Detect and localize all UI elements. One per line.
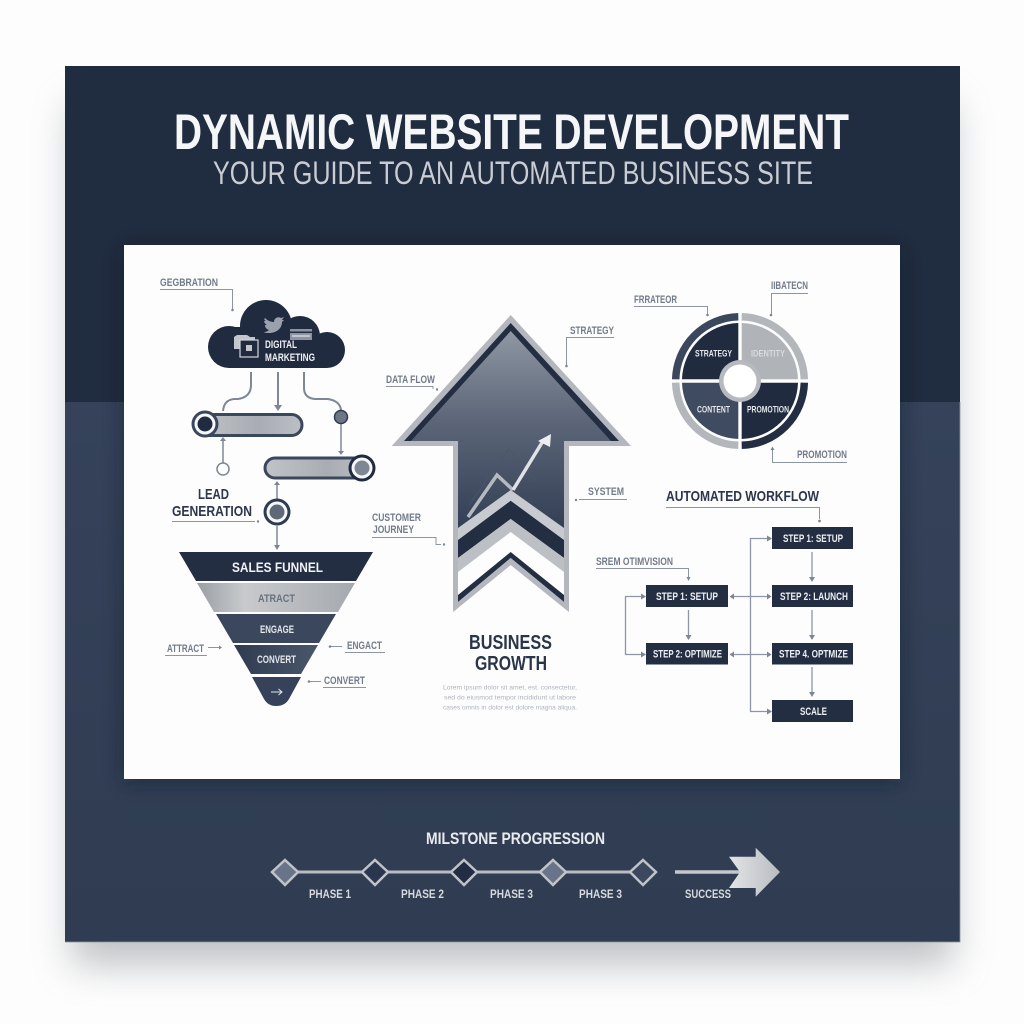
- phase labels: PHASE 3: [579, 887, 622, 901]
- phase labels: [309, 887, 731, 901]
- callout: data flow: DATA FLOW: [386, 374, 435, 386]
- target node: [264, 481, 290, 550]
- timeline line: [285, 870, 643, 874]
- description text: Lorem ipsum dolor sit amet, est. consectetur,: [443, 684, 577, 692]
- band: sales funnel: [179, 552, 373, 581]
- arrow white interior: [458, 490, 564, 602]
- callout: strategy: [565, 325, 614, 367]
- phase labels: SUCCESS: [685, 887, 731, 901]
- subtitle: YOUR GUIDE TO AN AUTOMATED BUSINESS SITE: [213, 155, 813, 191]
- callout: customer journey: CUSTOMER: [372, 512, 421, 524]
- band: convert: CONVERT: [257, 654, 296, 666]
- dark background panel: [65, 66, 960, 942]
- quadrant labels: IDENTITY: [751, 348, 786, 360]
- step: optimize right: STEP 4. OPTMIZE: [779, 648, 848, 660]
- description text: sed do eiusmod tempor incididunt ut labore: [444, 694, 576, 702]
- title: DYNAMIC WEBSITE DEVELOPMENT: [174, 104, 849, 160]
- workflow connectors: [626, 536, 815, 714]
- callout: customer journey: [372, 512, 445, 546]
- callout: data flow: [386, 374, 438, 391]
- arrow outline: [392, 315, 631, 612]
- step: scale: [772, 700, 853, 722]
- phase labels: PHASE 1: [309, 887, 351, 901]
- callout: iibatecn: IIBATECN: [771, 280, 808, 292]
- step: optimize left: STEP 2: OPTIMIZE: [653, 648, 722, 660]
- automated workflow: [596, 488, 853, 722]
- band: sales funnel: SALES FUNNEL: [232, 559, 323, 575]
- success arrow: [675, 848, 780, 897]
- arrow body: [411, 331, 611, 530]
- cloud text: DIGITAL: [265, 339, 297, 351]
- milestone progression: [272, 829, 780, 901]
- step: setup left: STEP 1: SETUP: [656, 591, 718, 603]
- band: attract: ATRACT: [258, 593, 295, 605]
- description text: [443, 684, 577, 712]
- callout: customer journey: JOURNEY: [373, 524, 415, 536]
- trend line icon: [468, 434, 551, 517]
- band: convert: [234, 645, 318, 674]
- callout: engact: ENGACT: [347, 640, 382, 652]
- callout: strategy: STRATEGY: [570, 325, 614, 337]
- callout: convert: CONVERT: [324, 675, 365, 687]
- phase labels: PHASE 2: [401, 887, 444, 901]
- workflow heading: [666, 488, 821, 522]
- callout: frrateor: FRRATEOR: [634, 294, 677, 306]
- heading: business growth: [469, 632, 552, 675]
- step: optimize left: [646, 643, 728, 664]
- central growth arrow: [392, 315, 631, 612]
- quadrant labels: STRATEGY: [695, 348, 732, 360]
- callout: promotion: PROMOTION: [797, 449, 847, 461]
- callout: iibatecn: [770, 280, 808, 316]
- callout: system: [575, 486, 627, 501]
- step: setup right: STEP 1: SETUP: [783, 533, 843, 545]
- callout: promotion: [770, 446, 847, 462]
- cloud text: [265, 339, 315, 364]
- hub: [719, 360, 761, 402]
- callout: attract: ATTRACT: [167, 643, 204, 655]
- sales funnel: [179, 552, 373, 706]
- quadrant labels: [695, 348, 789, 416]
- step: optimize right: [772, 643, 853, 664]
- band: engage: ENGAGE: [260, 624, 294, 636]
- icon: card: [290, 329, 312, 340]
- cloud: digital marketing: [208, 300, 345, 368]
- quadrant sectors: [682, 323, 738, 379]
- callout: system: SYSTEM: [588, 486, 624, 498]
- panel: white card: [124, 245, 900, 779]
- label: gegbration: GEGBRATION: [160, 277, 218, 289]
- callout: srem optimization: SREM OTIMVISION: [596, 556, 673, 568]
- callout: frrateor: [634, 294, 709, 316]
- callout: convert: [308, 675, 366, 688]
- quadrant labels: CONTENT: [697, 404, 730, 416]
- workflow heading: AUTOMATED WORKFLOW: [666, 488, 820, 505]
- band: attract: [197, 583, 355, 612]
- quadrant labels: PROMOTION: [747, 404, 789, 416]
- label: gegbration: [160, 277, 234, 311]
- heading: business growth: BUSINESS: [469, 632, 552, 654]
- callout: srem optimization: [596, 556, 690, 581]
- step: launch: STEP 2: LAUNCH: [780, 591, 848, 603]
- callout: engact: [329, 640, 385, 652]
- cloud text: MARKETING: [265, 352, 315, 364]
- lead generation heading: GENERATION: [172, 503, 252, 520]
- hollow node with arrow: [217, 437, 229, 475]
- connectors from cloud: [223, 372, 344, 455]
- icon: folders: [234, 335, 258, 357]
- step: setup right: [772, 527, 853, 549]
- band: tip with arrow: [252, 677, 301, 706]
- step: setup left: [646, 585, 728, 607]
- milestone diamonds: [272, 860, 656, 885]
- node bar 1: [192, 410, 302, 438]
- milestone heading: MILSTONE PROGRESSION: [426, 829, 605, 848]
- outer ring: [676, 317, 804, 445]
- lead generation heading: [172, 486, 259, 523]
- small node: [334, 410, 348, 424]
- arrow head dark edge: [404, 323, 619, 441]
- lead generation heading: LEAD: [198, 486, 229, 503]
- heading: business growth: GROWTH: [475, 653, 547, 675]
- arrow chevrons: [453, 490, 569, 612]
- step: scale: SCALE: [800, 706, 827, 718]
- icon: bird: [264, 317, 284, 333]
- description text: cases omnis in dolor est dolore magna aliqua.: [443, 704, 577, 712]
- donut chart: [676, 317, 804, 445]
- phase labels: PHASE 3: [490, 887, 533, 901]
- node bar 2: [265, 454, 376, 482]
- step: launch: [772, 585, 853, 607]
- band: engage: [216, 614, 336, 643]
- panel: lead generation flow: [160, 277, 376, 550]
